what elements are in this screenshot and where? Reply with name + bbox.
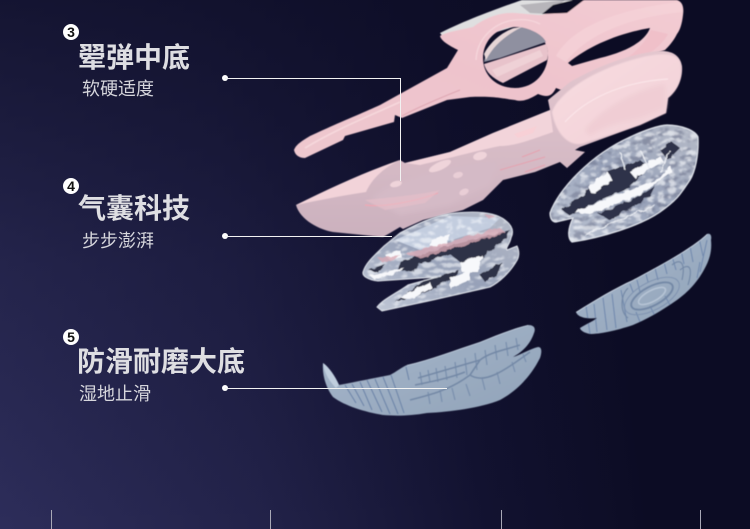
number badge 3: 3 [67, 24, 75, 40]
subheading 4: 步步澎湃 [82, 231, 154, 251]
feature 3 label [63, 24, 190, 99]
connector line: midsole [222, 75, 400, 181]
feature 4 label [63, 178, 190, 251]
subheading 5: 湿地止滑 [79, 384, 151, 404]
connector line: air pod [222, 233, 392, 239]
left grey outsole [320, 320, 545, 420]
ring rim and strap highlights [476, 20, 540, 60]
number badge 4 [63, 178, 79, 194]
ring window fill [484, 27, 546, 62]
upper pink plate [294, 0, 683, 158]
number badge 4: 4 [67, 178, 75, 194]
lower pink midsole [296, 51, 682, 237]
number badge 5 [63, 329, 79, 345]
heading 4: 气囊科技 [78, 193, 190, 224]
top dark slot [542, 0, 584, 14]
number badge 3 [63, 24, 79, 40]
bottom tick marks [52, 510, 700, 529]
midsole dimples [389, 150, 488, 197]
heading 5: 防滑耐磨大底 [77, 346, 245, 377]
heading 3: 翚弹中底 [78, 42, 190, 73]
right grey outsole [576, 233, 712, 335]
feature 5 label [63, 329, 245, 404]
subheading 3: 软硬适度 [82, 79, 154, 99]
connector line: outsole [222, 385, 447, 391]
right air pod [550, 125, 698, 242]
number badge 5: 5 [67, 329, 75, 345]
heel dome [552, 54, 681, 144]
left air pod [363, 212, 519, 311]
